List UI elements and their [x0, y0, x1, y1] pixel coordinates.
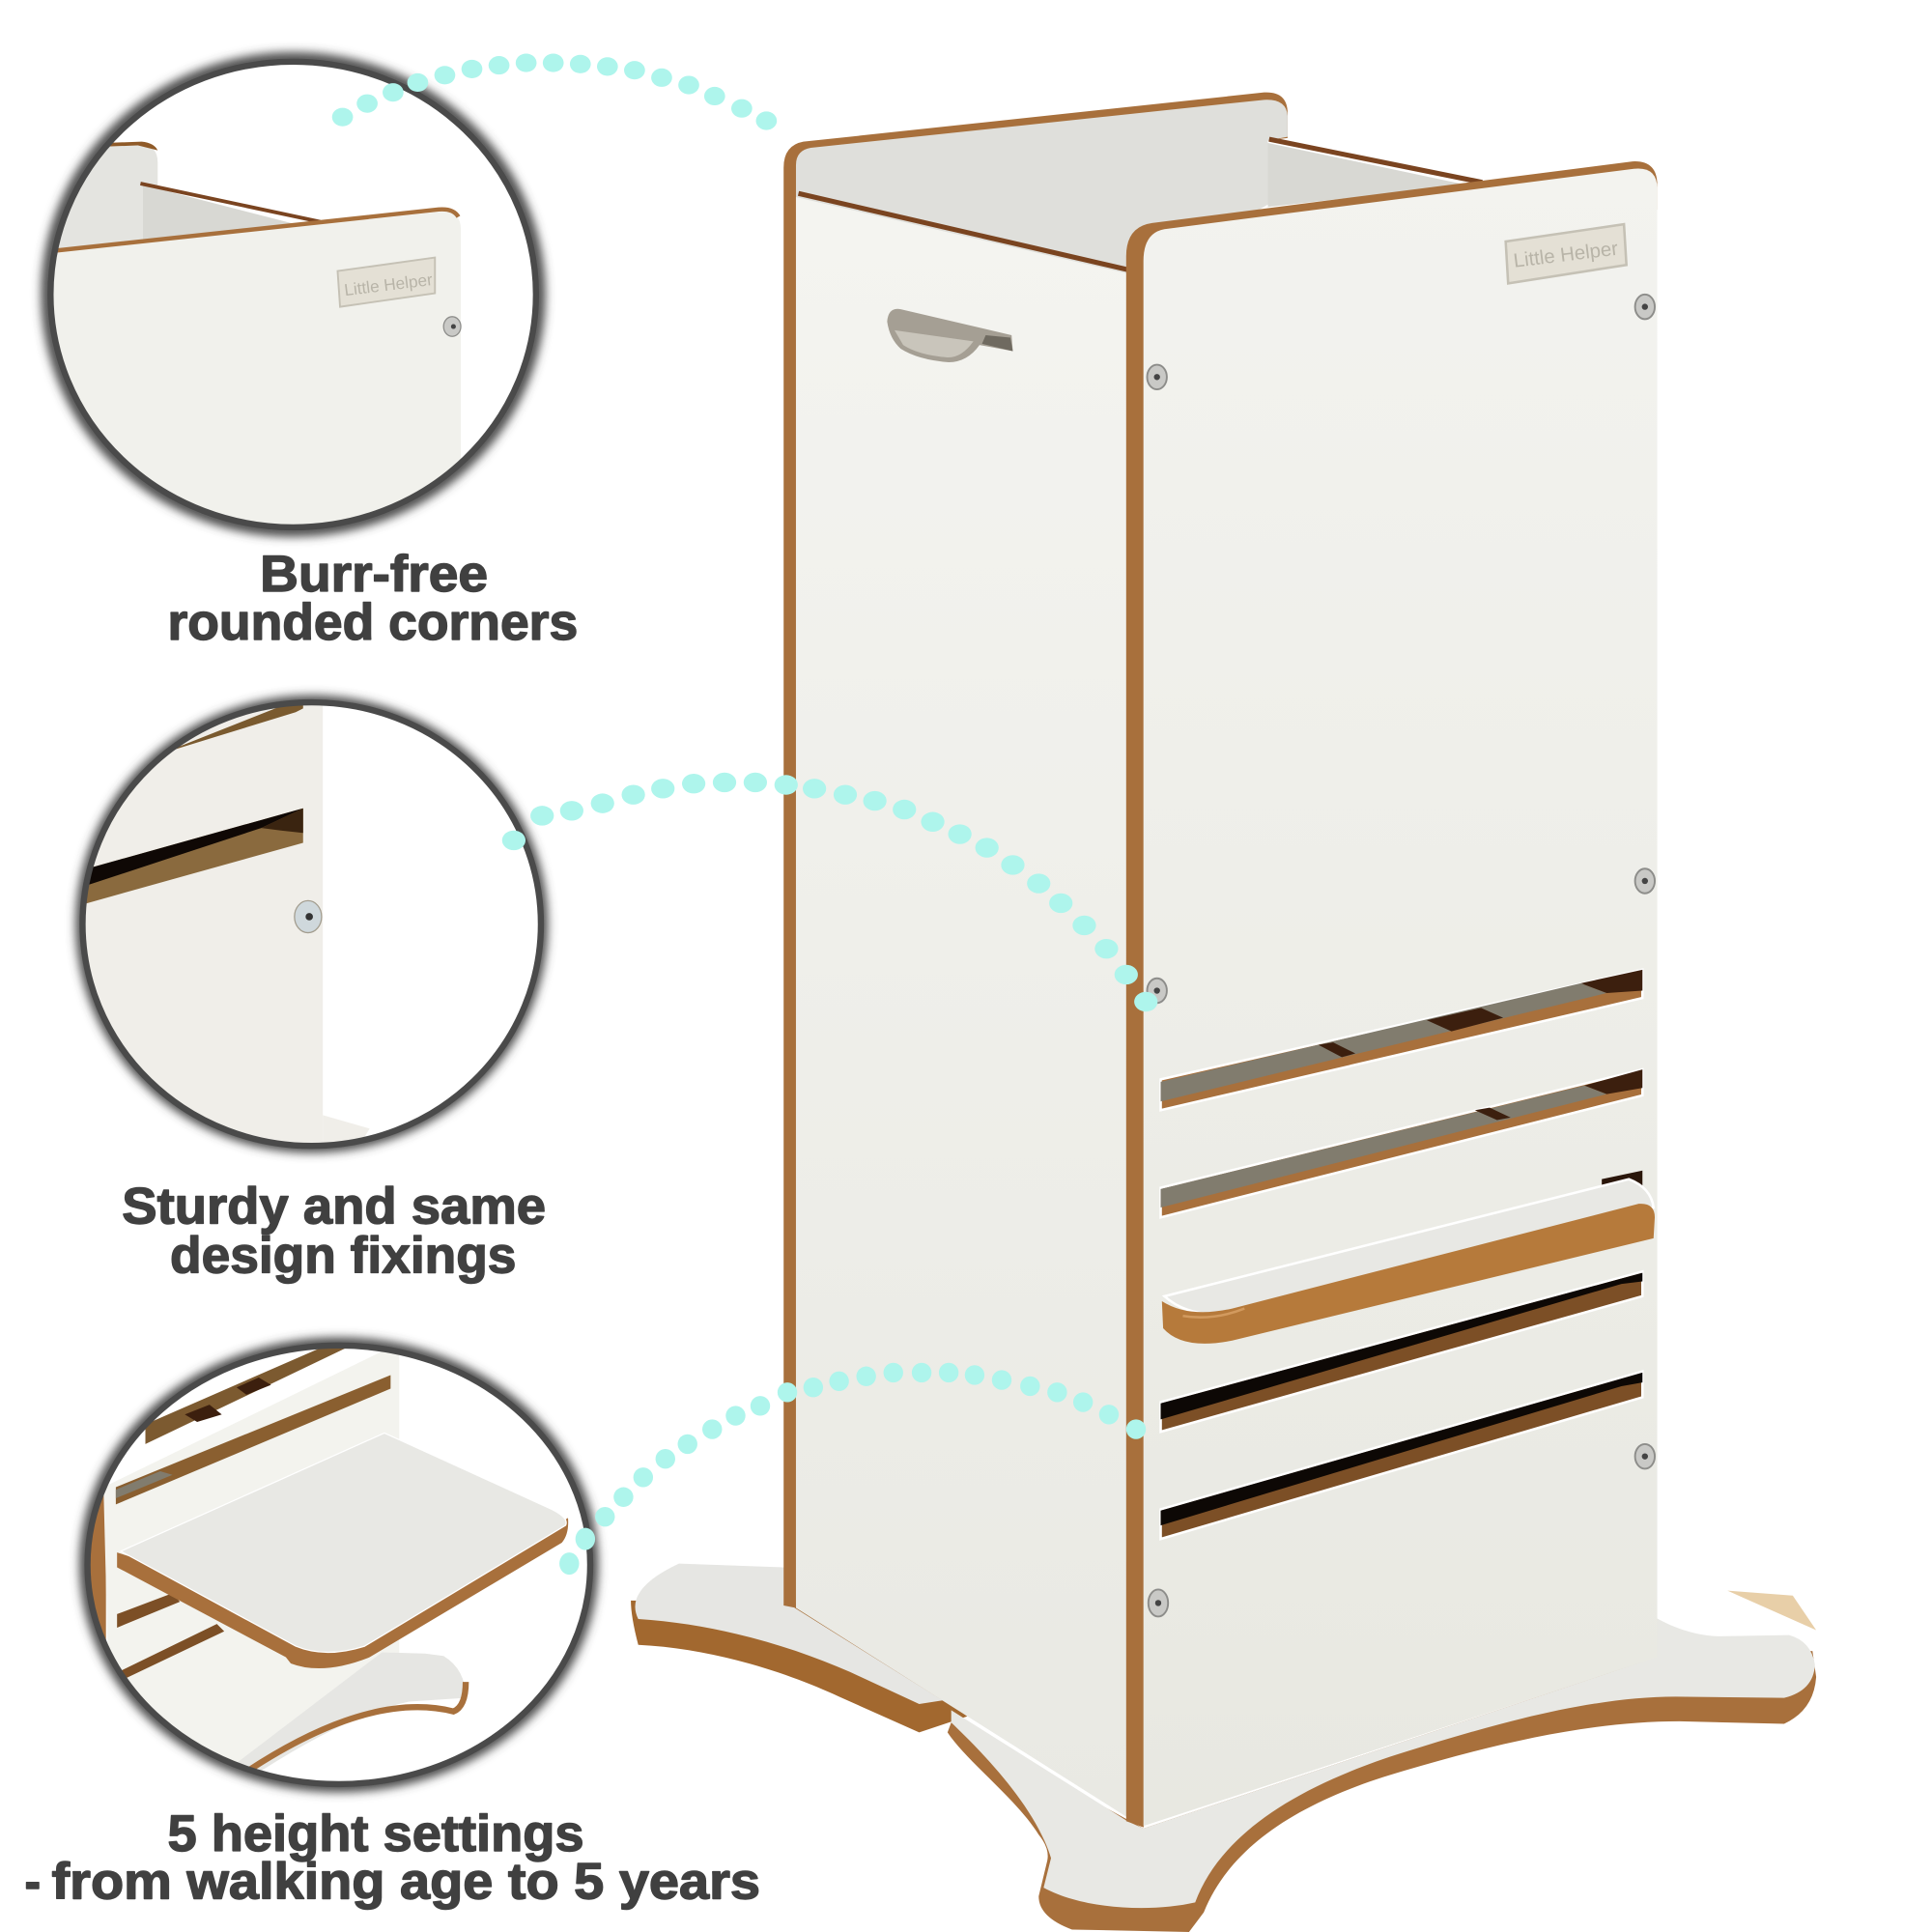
heading: rounded corners: rounded corners [167, 594, 578, 651]
panel: fixings detail [74, 690, 554, 1158]
height slot 2 [1161, 1069, 1642, 1217]
wood offcut [1727, 1591, 1816, 1631]
panel: rounded corners detail: Little Helper [343, 270, 434, 299]
height slot 3 behind step [1602, 1171, 1642, 1189]
height slot 4 [1161, 1271, 1642, 1432]
heading: fixings: design fixings [170, 1228, 516, 1285]
heading: height settings [25, 1805, 760, 1911]
back panel [783, 93, 1288, 1608]
heading: fixings [122, 1179, 546, 1285]
arrow: dotted arc height settings [559, 1363, 1146, 1575]
heading: height settings: - [25, 1854, 41, 1911]
base front and right foot [948, 1591, 1816, 1932]
inner side panel [1267, 139, 1482, 207]
logo plate [1506, 224, 1627, 283]
height slot 1 [1161, 970, 1642, 1110]
heading: height settings: 5 height settings [167, 1805, 584, 1862]
heading: fixings: Sturdy and same [122, 1179, 546, 1236]
panel: height settings detail [74, 1337, 604, 1799]
front panel [1126, 161, 1658, 1828]
heading: rounded corners [167, 546, 578, 651]
product: learning tower [631, 93, 1816, 1932]
height slot 5 [1161, 1372, 1642, 1539]
logo plate: Little Helper [1513, 239, 1619, 272]
left side panel [796, 193, 1128, 1817]
arrow: dotted arc fixings [502, 773, 1157, 1011]
base left foot [631, 1564, 967, 1732]
heading: height settings: from walking age to 5 years [52, 1854, 760, 1911]
panel: rounded corners detail [37, 49, 554, 542]
icon: screws [1148, 295, 1655, 1616]
icon: handle [887, 309, 1012, 362]
arrow: dotted arc rounded corners [332, 53, 777, 130]
heading: rounded corners: Burr-free [260, 546, 488, 603]
adjustable step [1162, 1179, 1655, 1344]
